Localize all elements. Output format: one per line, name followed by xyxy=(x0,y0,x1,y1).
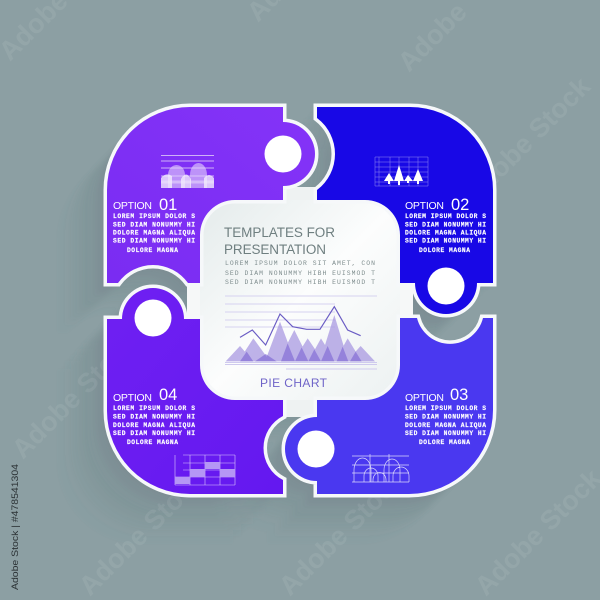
heading: option 04 xyxy=(113,386,177,404)
text: option 2 body: LOREM IPSUM DOLOR S xyxy=(405,213,486,220)
heading: option 04: OPTION xyxy=(113,392,152,404)
watermark: Adobe Stock xyxy=(273,463,412,600)
text: centre body: SED DIAM NONUMMY HIBH EUISMOD T xyxy=(225,270,375,277)
heading: option 02 xyxy=(405,196,469,214)
knob hole 1 xyxy=(264,136,302,172)
panel: centre card xyxy=(187,187,413,417)
text: option 4 body: DOLORE MAGNA xyxy=(127,439,178,446)
heading: option 01: 01 xyxy=(159,196,177,214)
heading: option 03: OPTION xyxy=(405,392,444,404)
title: PRESENTATION xyxy=(224,242,326,257)
title xyxy=(224,225,335,257)
text: option 2 body: SED DIAM NONUMMY HI xyxy=(405,238,486,244)
stock credit: Adobe Stock | #478541304 xyxy=(10,464,21,590)
text: option 4 body: SED DIAM NONUMMY HI xyxy=(113,414,195,420)
text: centre body: SED DIAM NONUMMY HIBH EUISMOD T xyxy=(225,279,375,286)
heading: option 02: 02 xyxy=(451,196,469,214)
knob hole 3 xyxy=(298,430,334,468)
text: option 3 body: SED DIAM NONUMMY HI xyxy=(405,414,486,420)
text: option 3 body: DOLORE MAGNA xyxy=(419,439,470,446)
text: option 4 body: LOREM IPSUM DOLOR S xyxy=(113,405,195,412)
text: option 4 body: DOLORE MAGNA ALIQUA xyxy=(113,422,195,429)
text: centre body xyxy=(225,260,375,286)
text: option 1 body: SED DIAM NONUMMY HI xyxy=(113,222,195,228)
watermark: Adobe Stock xyxy=(6,326,145,464)
icon: dome chart 1 xyxy=(161,156,214,188)
icon: dome line chart 3 xyxy=(352,454,409,482)
heading: option 03 xyxy=(405,386,468,404)
panel: option 1 xyxy=(107,107,315,283)
panel: option 4 xyxy=(107,288,283,494)
heading: option 03: 03 xyxy=(450,386,468,404)
title: TEMPLATES FOR xyxy=(224,225,335,240)
text: option 2 body: SED DIAM NONUMMY HI xyxy=(405,222,486,228)
text: option 2 body xyxy=(405,213,486,254)
watermark: Adobe Stock xyxy=(73,463,212,600)
text: option 2 body: DOLORE MAGNA ALIQUA xyxy=(405,230,486,236)
heading: option 02: OPTION xyxy=(405,200,444,212)
icon: hatched grid chart 4 xyxy=(175,455,235,485)
text: option 1 body: DOLORE MAGNA xyxy=(127,247,178,254)
text: option 1 body xyxy=(113,213,195,254)
text: option 1 body: DOLORE MAGNA ALIQUA xyxy=(113,230,195,236)
area and line chart xyxy=(225,296,377,369)
text: option 4 body: SED DIAM NONUMMY HI xyxy=(113,430,195,437)
text: option 3 body: SED DIAM NONUMMY HI xyxy=(405,430,486,437)
text: option 3 body: DOLORE MAGNA ALIQUA xyxy=(405,422,486,429)
text: option 1 body: SED DIAM NONUMMY HI xyxy=(113,238,195,244)
text: option 1 body: LOREM IPSUM DOLOR S xyxy=(113,213,195,220)
text: option 3 body: LOREM IPSUM DOLOR S xyxy=(405,405,486,412)
heading: option 04: 04 xyxy=(159,386,177,404)
text: centre body: LOREM IPSUM DOLOR SIT AMET, CON xyxy=(225,260,375,267)
chart label: PIE CHART xyxy=(260,376,328,390)
heading: option 01 xyxy=(113,196,177,214)
text: option 3 body xyxy=(405,405,486,446)
knob hole 2 xyxy=(428,268,464,304)
long shadow xyxy=(57,113,487,544)
panel: option 2 xyxy=(317,107,493,314)
panel: option 3 xyxy=(285,318,493,494)
watermark: Adobe Stock xyxy=(458,71,597,209)
heading: option 01: OPTION xyxy=(113,200,152,212)
knob hole 4 xyxy=(134,300,172,336)
text: option 4 body xyxy=(113,405,195,446)
text: option 2 body: DOLORE MAGNA xyxy=(419,247,470,254)
icon: triangle chart 2 xyxy=(375,157,428,186)
